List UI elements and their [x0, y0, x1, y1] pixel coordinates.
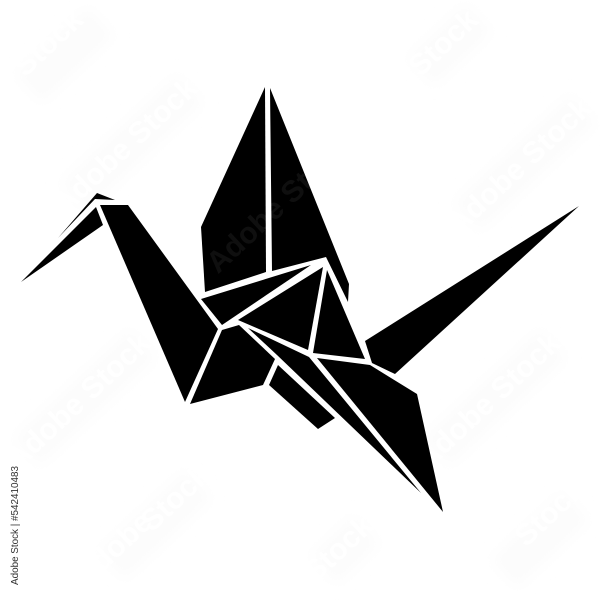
watermark text over crane: Adobe Stock [200, 130, 357, 280]
lower body [190, 325, 275, 404]
body centre triangle [238, 267, 323, 350]
watermark text on background: Stock [508, 473, 591, 553]
body top strip [201, 265, 311, 325]
watermark text on background: Stock [7, 3, 90, 83]
watermark text on background: Stock [297, 509, 380, 589]
beak lower [21, 207, 103, 282]
watermark text on background: Adobe Stock [410, 326, 567, 476]
long sliver [248, 328, 421, 493]
watermark text on background: Adobe Stock [441, 91, 598, 241]
lower tail [269, 365, 335, 429]
watermark text on background: Stock [134, 458, 217, 538]
back wing left panel [201, 87, 266, 292]
watermark text on background: Adobe Stock [47, 71, 204, 221]
watermark text on background: Adobe Stock [0, 326, 157, 476]
body right triangle [313, 270, 365, 359]
crane shapes [21, 87, 579, 512]
back wing right panel [270, 88, 349, 302]
watermark text on background: Adobe [68, 505, 159, 593]
front wing [317, 358, 443, 512]
right wing [365, 206, 579, 374]
watermark text on background: Stock [402, 3, 485, 83]
beak upper sliver [58, 193, 115, 238]
stock id caption: Adobe Stock | #542410483 [10, 466, 21, 585]
neck [100, 205, 218, 402]
